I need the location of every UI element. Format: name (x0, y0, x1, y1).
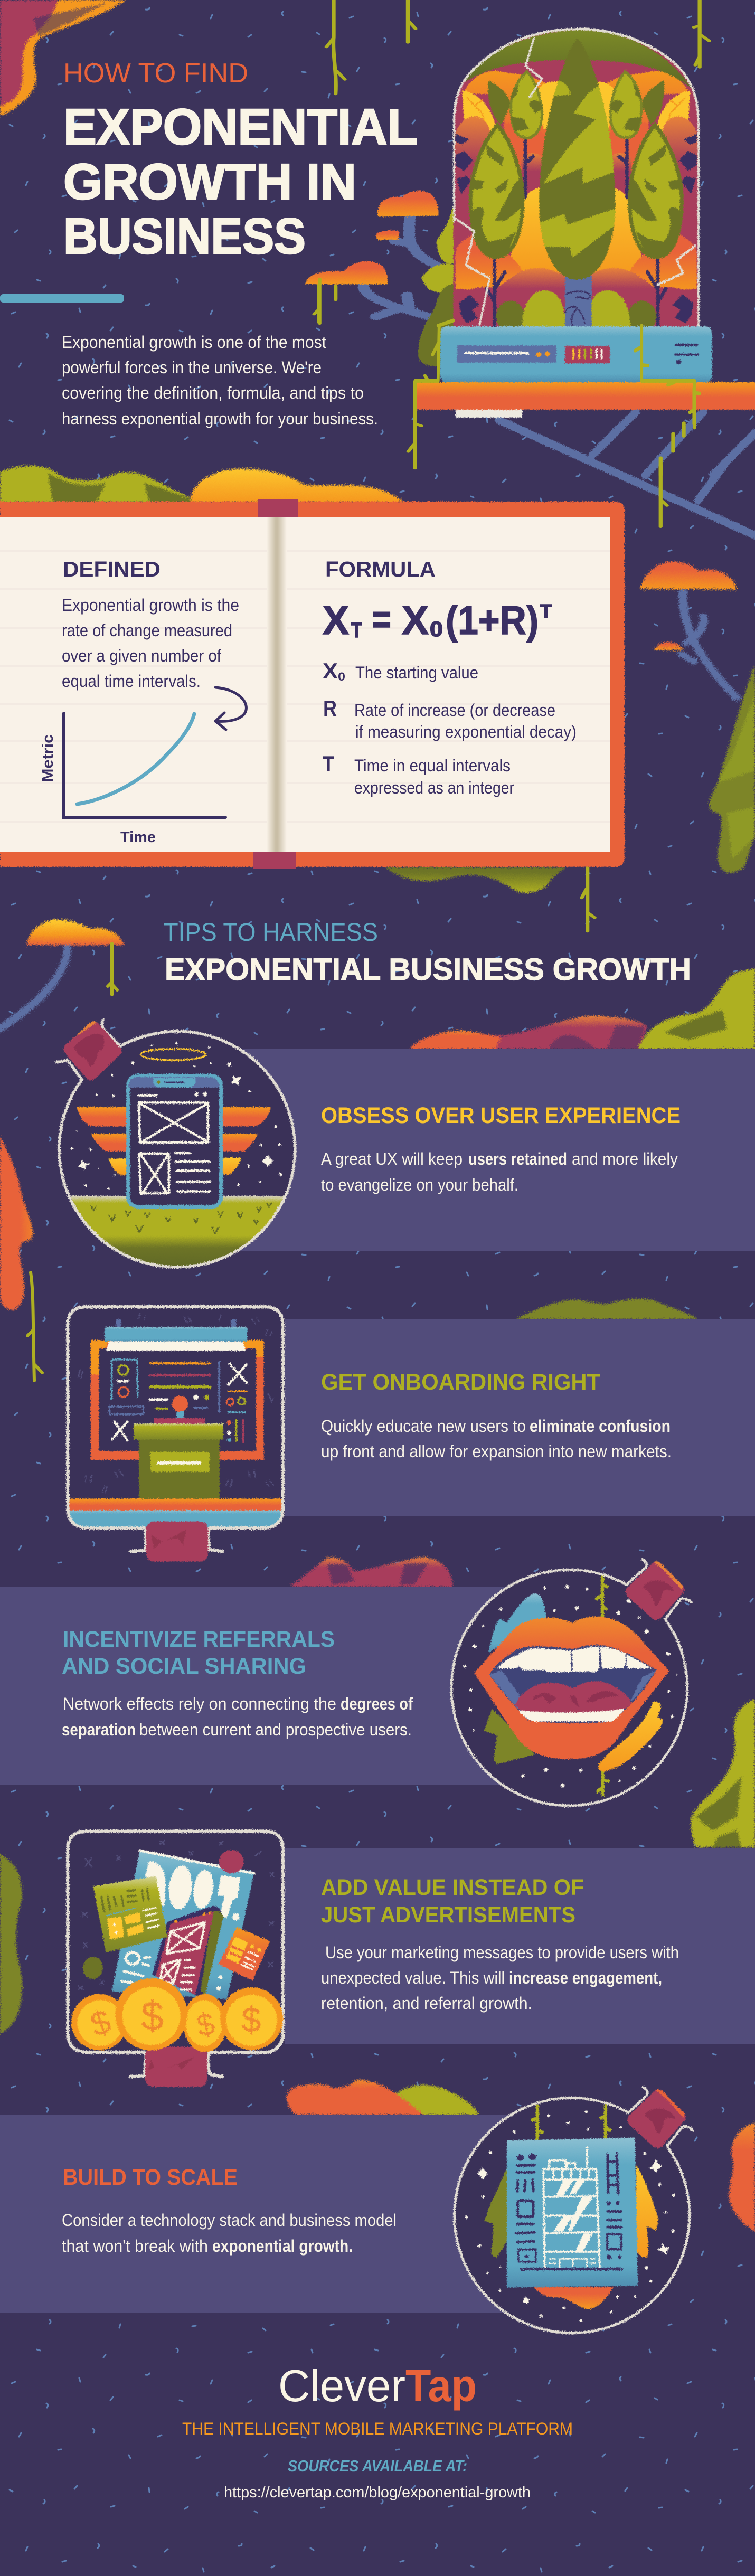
panel: incentivize referrals (0, 1559, 691, 1806)
axis label: time: Time (120, 829, 156, 846)
gold coins: $ (194, 2006, 218, 2044)
footer: clevertap logo: Clever (278, 2361, 405, 2411)
title (62, 1627, 335, 1679)
description: between current and prospective users. (139, 1720, 412, 1739)
defined text: equal time intervals. (62, 672, 201, 691)
vines: on device and shelf (415, 320, 700, 428)
heading: formula: FORMULA (325, 557, 436, 581)
title: BUILD TO SCALE (63, 2165, 238, 2190)
r definition: R (323, 696, 337, 721)
footer: sources heading: SOURCES AVAILABLE AT: (288, 2457, 467, 2475)
icon: open mouth badge (451, 1559, 691, 1806)
icon: presentation podium badge (68, 1307, 284, 1562)
icon: skyscraper banner badge (454, 2087, 693, 2333)
illustration: terrarium (415, 29, 755, 418)
t definition: T (323, 751, 334, 776)
description: exponential growth. (212, 2237, 353, 2256)
formula equation: T (540, 600, 552, 622)
corner blob: top left (0, 0, 125, 115)
center tree (537, 38, 618, 280)
icon: ads and coins badge (68, 1831, 284, 2087)
panel: add value (68, 1831, 755, 2087)
intro text: Exponential growth is one of the most (62, 333, 326, 352)
title: EXPONENTIAL (63, 99, 418, 155)
teal accent bar (0, 294, 124, 303)
gold coins (71, 1978, 283, 2052)
title (63, 99, 418, 265)
panel band (285, 1848, 755, 2044)
dome interior (454, 29, 700, 332)
title: BUSINESS (63, 208, 306, 265)
footer: source url: https://clevertap.com/blog/exponential-growth (224, 2484, 531, 2501)
panel: get onboarding right (68, 1307, 755, 1562)
panel: build to scale (0, 2087, 693, 2333)
description: A great UX will keep (321, 1149, 463, 1168)
description: degrees of (341, 1694, 413, 1713)
description (321, 1149, 678, 1194)
r definition: if measuring exponential decay) (355, 722, 577, 741)
title: ADD VALUE INSTEAD OF (321, 1875, 584, 1900)
intro text: powerful forces in the universe. We're (62, 358, 322, 377)
shelf struts (499, 412, 755, 535)
t definition: Time in equal intervals (354, 756, 511, 775)
title: GROWTH IN (63, 154, 356, 210)
defined text: Exponential growth is the (62, 596, 239, 615)
heading: tips: TIPS TO HARNESS (164, 919, 378, 947)
description (62, 1694, 413, 1739)
heading: how to find: HOW TO FIND (63, 58, 248, 89)
footer: clevertap logo (278, 2361, 477, 2411)
footer: clevertap logo: Tap (405, 2361, 477, 2411)
description: Network effects rely on connecting the (63, 1694, 336, 1713)
mushroom branches (305, 191, 439, 318)
description: eliminate confusion (530, 1417, 671, 1436)
description: users retained (468, 1149, 567, 1168)
description: Consider a technology stack and business model (62, 2211, 397, 2230)
defined text: rate of change measured (62, 621, 232, 640)
formula equation (323, 597, 552, 643)
icon: curved arrow (215, 687, 246, 730)
panel: open book (0, 499, 625, 869)
gold coins: $ (141, 1994, 164, 2039)
footer: tagline: THE INTELLIGENT MOBILE MARKETING PLATFORM (182, 2419, 573, 2438)
description: up front and allow for expansion into new markets. (321, 1442, 672, 1461)
trunk center (565, 276, 592, 328)
panel band (211, 1049, 755, 1251)
device box (440, 326, 712, 382)
formula equation: X (323, 598, 349, 643)
description: to evangelize on your behalf. (321, 1175, 518, 1194)
description: Use your marketing messages to provide users with (325, 1943, 679, 1962)
intro text (62, 333, 378, 428)
icon: phone wireframe badge (53, 1020, 303, 1268)
panel band (0, 2115, 528, 2313)
description: Quickly educate new users to (321, 1417, 526, 1436)
defined text (62, 596, 239, 691)
x0 definition (323, 658, 478, 683)
title: JUST ADVERTISEMENTS (321, 1902, 575, 1928)
vines: by book (582, 465, 667, 931)
chart: exponential curve (40, 713, 225, 846)
book cover (0, 502, 625, 867)
mushroom and hills: tips section (0, 920, 755, 2232)
axis label: metric: Metric (40, 734, 56, 782)
description: retention, and referral growth. (321, 1994, 532, 2013)
x0 definition: The starting value (355, 663, 478, 682)
dome chalk outline and cracks (454, 29, 699, 327)
description (62, 2211, 397, 2256)
vines: under shelf (408, 382, 694, 475)
growth curve (77, 714, 194, 804)
intro text: harness exponential growth for your business. (62, 409, 378, 428)
description: that won't break with (62, 2237, 208, 2256)
r definition (323, 696, 577, 741)
description (321, 1943, 679, 2013)
formula definitions (323, 658, 577, 797)
heading: tips (164, 919, 691, 987)
orange shelf (415, 382, 755, 418)
heading: tips: EXPONENTIAL BUSINESS GROWTH (165, 952, 691, 987)
description (321, 1417, 672, 1461)
description: increase engagement, (509, 1968, 662, 1987)
title (321, 1875, 584, 1928)
formula equation: T (351, 619, 362, 642)
hanging vines: top (315, 0, 709, 323)
title: INCENTIVIZE REFERRALS (63, 1627, 335, 1652)
r definition: Rate of increase (or decrease (354, 701, 555, 720)
description: unexpected value. This will (321, 1968, 505, 1987)
x0 definition: X (323, 658, 338, 683)
gold coins: $ (241, 2001, 261, 2040)
title: OBSESS OVER USER EXPERIENCE (321, 1103, 681, 1128)
x0 definition: 0 (338, 670, 345, 683)
formula equation: = (372, 597, 391, 642)
faint page rules (0, 551, 610, 822)
chart axes (64, 713, 225, 817)
panel band (285, 1319, 755, 1516)
t definition: expressed as an integer (354, 778, 514, 797)
defined text: over a given number of (62, 646, 221, 665)
outside bushes (418, 197, 474, 366)
description: and more likely (572, 1149, 678, 1168)
formula equation: 0 (430, 618, 443, 641)
t definition (323, 751, 514, 797)
spine (267, 517, 287, 852)
panel band (0, 1587, 528, 1785)
book pages (0, 517, 610, 852)
gold coins: $ (86, 2003, 115, 2044)
title: GET ONBOARDING RIGHT (321, 1370, 600, 1395)
intro text: covering the definition, formula, and tips to (62, 383, 364, 402)
spine tabs (253, 499, 298, 869)
hills above and below book; side leaf (0, 466, 755, 893)
heading: defined: DEFINED (63, 557, 161, 581)
formula equation: (1+R) (446, 598, 539, 643)
vines: tips section (27, 943, 117, 1381)
panel: obsess over user experience (53, 1020, 755, 1268)
vines: on mushroom (314, 279, 336, 324)
formula equation: X (402, 598, 429, 643)
description: separation (62, 1720, 136, 1739)
title: AND SOCIAL SHARING (62, 1654, 306, 1679)
